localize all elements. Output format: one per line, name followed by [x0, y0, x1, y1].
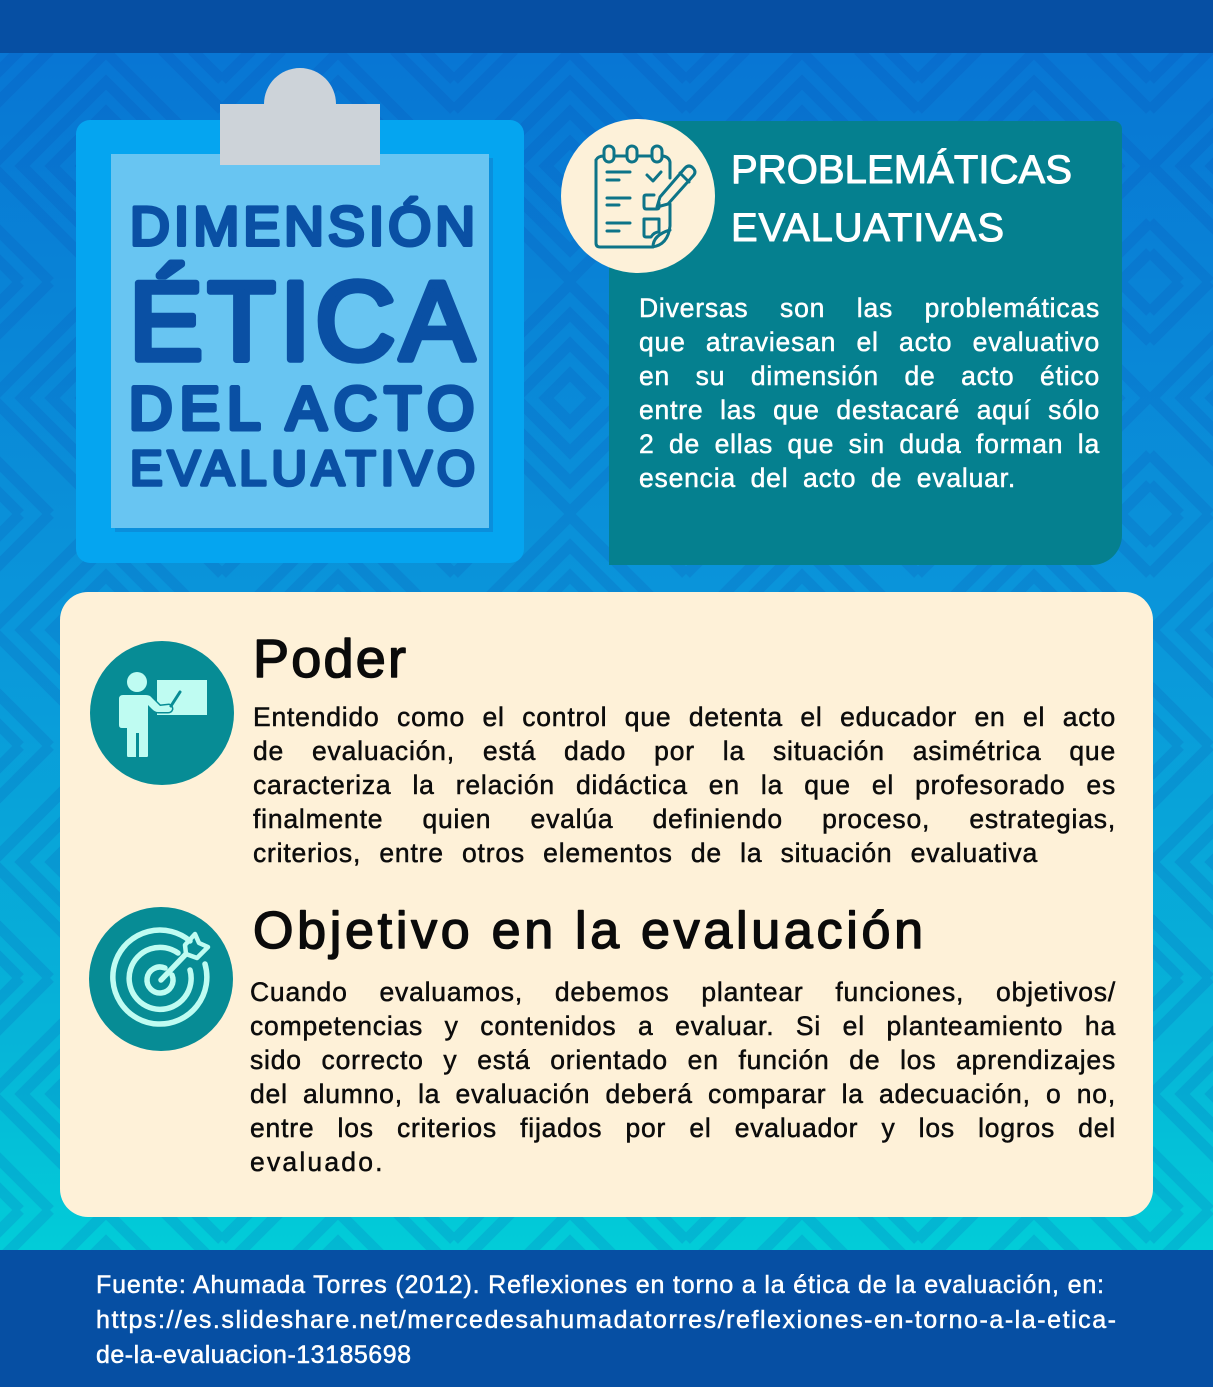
title text: ÉTICA — [129, 260, 474, 384]
panel: problemáticas evaluativas — [609, 121, 1122, 565]
text block: poder: Entendido como el control que detenta el educador en el acto — [253, 702, 1116, 732]
clipboard clip — [220, 68, 380, 165]
clipboard board — [76, 120, 524, 563]
footer: source citation — [0, 1250, 1213, 1387]
text block: intro: entre las que destacaré aquí sólo — [639, 395, 1100, 425]
text block: poder: criterios, entre otros elementos de la situación evaluativa — [253, 838, 1038, 868]
text block: intro: Diversas son las problemáticas — [639, 293, 1100, 323]
heading: problemáticas evaluativas: PROBLEMÁTICAS — [731, 147, 1072, 192]
text block: intro: esencia del acto de evaluar. — [639, 463, 1016, 493]
icon: target with arrow — [89, 907, 233, 1051]
header band — [0, 0, 1213, 53]
text block: objetivo: entre los criterios fijados por el evaluador y los logros del — [250, 1113, 1116, 1143]
heading: problemáticas evaluativas: EVALUATIVAS — [731, 206, 1004, 250]
text block: objetivo: sido correcto y está orientado en función de los aprendizajes — [250, 1045, 1116, 1075]
text block: intro: 2 de ellas que sin duda forman la — [639, 429, 1100, 459]
title text — [129, 195, 475, 496]
panel: clipboard title — [76, 68, 524, 563]
text block: objetivo: del alumno, la evaluación deberá comparar la adecuación, o no, — [250, 1079, 1116, 1109]
icon: teacher at board — [90, 641, 234, 785]
paper sheet — [111, 154, 493, 532]
text block: poder: finalmente quien evalúa definiendo proceso, estrategias, — [253, 804, 1116, 834]
heading: problemáticas evaluativas — [731, 147, 1072, 250]
text block: intro: que atraviesan el acto evaluativo — [639, 327, 1100, 357]
text block: objetivo: Cuando evaluamos, debemos plantear funciones, objetivos/ — [250, 977, 1116, 1007]
text block: poder: caracteriza la relación didáctica en la que el profesorado es — [253, 770, 1116, 800]
footer text — [96, 1271, 1116, 1369]
icon: checklist with pencil — [561, 119, 715, 273]
panel: cream content card — [60, 592, 1153, 1217]
heading: objetivo en la evaluación: Objetivo en la evaluación — [253, 902, 923, 960]
footer text: de-la-evaluacion-13185698 — [96, 1341, 411, 1369]
text block: intro — [639, 293, 1100, 493]
title text: DEL ACTO — [129, 375, 474, 442]
text block: poder — [253, 702, 1116, 868]
footer text: Fuente: Ahumada Torres (2012). Reflexiones en torno a la ética de la evaluación, en: — [96, 1271, 1104, 1299]
title text: DIMENSIÓN — [130, 195, 475, 257]
text block: intro: en su dimensión de acto ético — [639, 361, 1100, 391]
heading: poder: Poder — [253, 629, 406, 689]
text block: objetivo — [250, 977, 1116, 1177]
title text: EVALUATIVO — [130, 442, 475, 496]
text block: poder: de evaluación, está dado por la situación asimétrica que — [253, 736, 1116, 766]
text block: objetivo: evaluado. — [250, 1147, 385, 1177]
footer text: https://es.slideshare.net/mercedesahumadatorres/reflexiones-en-torno-a-la-etica- — [96, 1306, 1116, 1334]
text block: objetivo: competencias y contenidos a evaluar. Si el planteamiento ha — [250, 1011, 1116, 1041]
